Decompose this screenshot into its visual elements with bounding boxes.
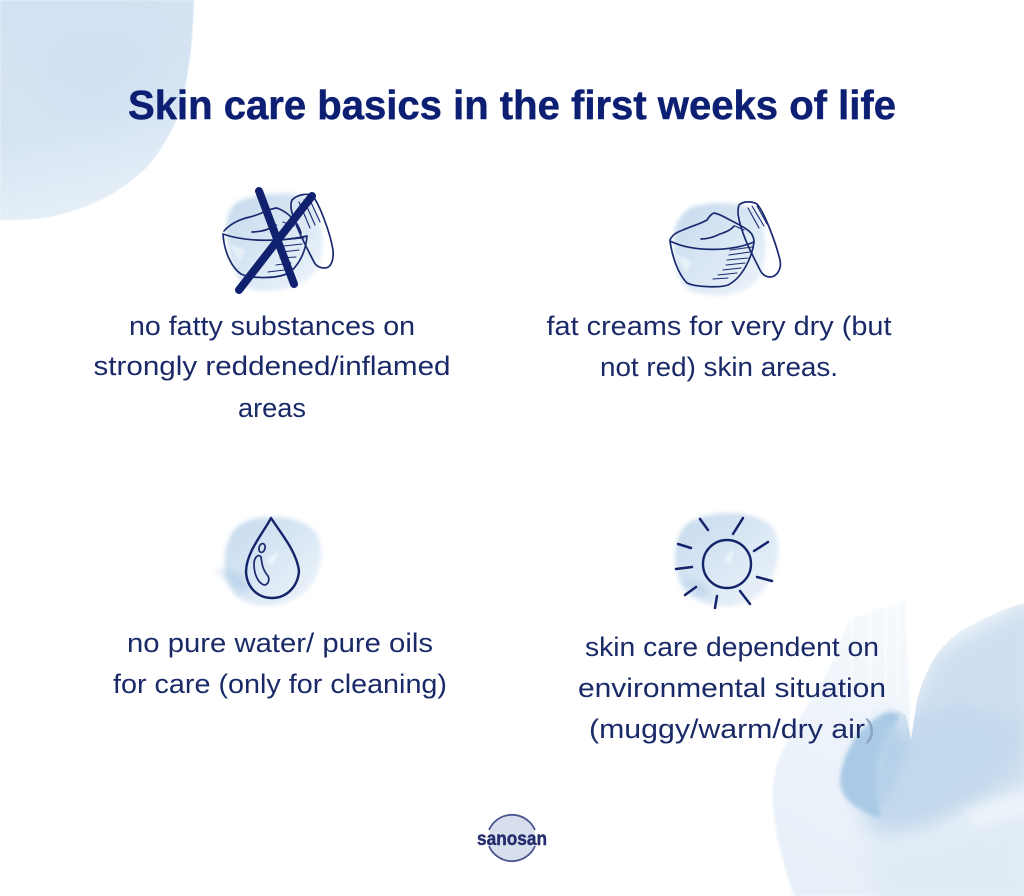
watercolor blob: top left	[0, 0, 194, 220]
panel: skin care dependent	[578, 513, 886, 744]
watercolor blob: bottom right	[773, 590, 1024, 896]
logo: sanosan: sanosan	[477, 829, 547, 850]
text: no fatty substances: no fatty substances on	[129, 311, 415, 341]
text: fat creams: fat creams for very dry (but	[546, 311, 892, 341]
text: skin care dependent: (muggy/warm/dry air )	[589, 714, 875, 744]
text: skin care dependent: skin care dependent on	[585, 632, 879, 662]
text: no pure water: for care (only for cleaning)	[113, 669, 447, 699]
logo: sanosan	[477, 815, 547, 861]
panel: no pure water	[113, 517, 447, 699]
text: fat creams	[546, 311, 892, 382]
text: no pure water	[113, 628, 447, 699]
icon: water drop	[216, 517, 321, 606]
text: skin care dependent: environmental situation	[578, 673, 886, 703]
icon: cream jar	[670, 202, 780, 295]
title: Skin care basics in the first weeks of life	[128, 82, 896, 128]
text: no fatty substances	[94, 311, 450, 423]
panel: no fatty substances	[94, 191, 450, 423]
text: no fatty substances: strongly reddened/inflamed	[94, 351, 450, 381]
icon: crossed-out cream jar	[223, 191, 333, 291]
icon: sun	[675, 513, 778, 608]
text: no fatty substances: areas	[238, 393, 306, 423]
text: no pure water: no pure water/ pure oils	[127, 628, 433, 658]
text: fat creams: not red) skin areas.	[600, 352, 838, 382]
panel: fat creams	[546, 202, 892, 382]
text: skin care dependent	[578, 632, 886, 744]
